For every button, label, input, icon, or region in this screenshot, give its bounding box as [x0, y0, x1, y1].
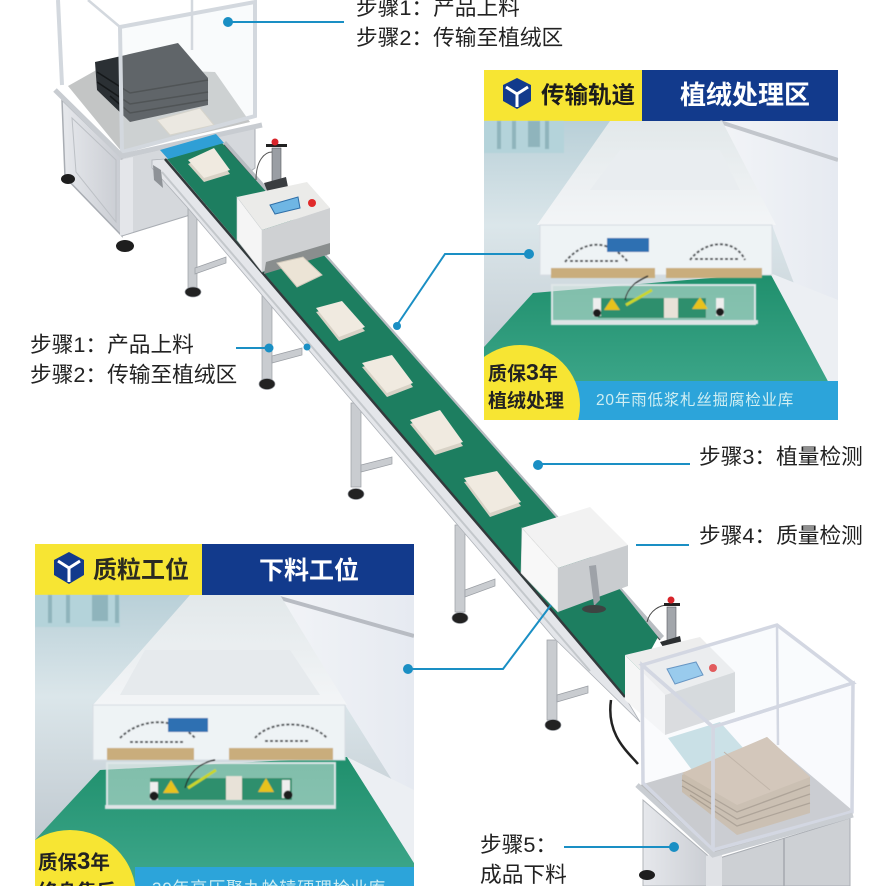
- device upper: [540, 225, 772, 278]
- callout: step 3: 步骤3：植量检测: [699, 444, 863, 469]
- header right: 植绒处理区: [680, 80, 810, 110]
- callout: step 5: 步骤5：: [480, 832, 557, 857]
- body 3: [625, 637, 735, 735]
- header left: [484, 70, 642, 121]
- callout: step 3: [533, 444, 863, 470]
- callout: top steps 1-2: [223, 0, 563, 50]
- long box top: [537, 121, 776, 225]
- callout: step 5: [480, 832, 679, 886]
- blue infeed plate: [160, 134, 224, 159]
- touch screen: [270, 197, 300, 214]
- right wall: [724, 121, 838, 300]
- machine body: [237, 182, 330, 274]
- pad exiting machine: [277, 257, 322, 287]
- device lower: [552, 276, 758, 324]
- side rail: [152, 141, 664, 722]
- outfeed cabinet: [637, 625, 853, 886]
- cabinet base: [61, 100, 255, 252]
- pneumatic column: [256, 138, 288, 193]
- callout: top steps 1-2: 步骤2：传输至植绒区: [356, 25, 563, 50]
- machine 1: plush station: [237, 138, 330, 287]
- warranty badge 2: [35, 830, 136, 886]
- conveyor legs: [185, 205, 588, 730]
- right wall 2: [280, 595, 414, 790]
- warranty badge 2: 质保3年: [38, 848, 110, 875]
- callout: left steps 1-2: [30, 332, 310, 387]
- photo 2: [35, 595, 414, 886]
- warranty badge: [484, 345, 580, 420]
- outfeed blue plate: [668, 722, 745, 770]
- header right: [642, 70, 838, 121]
- window band: [484, 121, 564, 153]
- icon: cube: [503, 78, 531, 109]
- blue strip: 20年雨低浆札丝掘腐检业库: [596, 391, 794, 409]
- blue strip: [575, 381, 838, 420]
- header left 2: [35, 544, 202, 595]
- red button: [308, 199, 316, 207]
- finished goods stack: [682, 737, 810, 835]
- arrow: unloading connector: [403, 605, 551, 674]
- callout: left steps 1-2: 步骤1：产品上料: [30, 332, 194, 357]
- pneumatic column 3: [647, 596, 682, 652]
- arrow: plush zone connector: [393, 249, 534, 330]
- machine 3: outfeed station: [625, 596, 745, 770]
- white pad on plate: [157, 108, 214, 135]
- machine 2: inspection box: [521, 507, 628, 613]
- device lower 2: [105, 760, 335, 809]
- green mat: [484, 274, 828, 381]
- red button 3: [709, 664, 717, 672]
- device upper 2: [93, 705, 345, 760]
- warranty badge: 质保3年: [488, 359, 558, 385]
- blue strip 2: [135, 867, 414, 886]
- screen 3: [667, 662, 703, 684]
- black cable: [610, 700, 638, 764]
- grey floor plate: [68, 68, 250, 152]
- acrylic frame: [55, 0, 262, 156]
- conveyor line: [152, 134, 664, 764]
- infeed cabinet: [55, 0, 262, 252]
- product pads: [188, 148, 521, 517]
- cabinet base 2: [639, 800, 850, 886]
- green mat 2: [35, 757, 414, 886]
- floor plate 2: [640, 745, 852, 855]
- header right 2: 下料工位: [259, 556, 359, 585]
- black product stack: [95, 43, 208, 122]
- panel: unloading station: [4, 544, 414, 886]
- panel: plush treatment zone: [484, 70, 838, 420]
- photo: [484, 120, 838, 381]
- window band 2: [35, 595, 120, 627]
- icon: cube 2: [54, 552, 84, 584]
- belt edge: [165, 159, 625, 697]
- callout: left steps 1-2: 步骤2：传输至植绒区: [30, 362, 237, 387]
- callout: step 4: 步骤4：质量检测: [699, 523, 863, 548]
- header right 2: [202, 544, 414, 595]
- green belt: [167, 143, 658, 697]
- long box top 2: [93, 595, 347, 705]
- warranty badge: 植绒处理: [488, 390, 564, 412]
- acrylic frame 2: [637, 625, 853, 855]
- header left 2: 质粒工位: [93, 556, 189, 584]
- header left: 传输轨道: [541, 82, 635, 108]
